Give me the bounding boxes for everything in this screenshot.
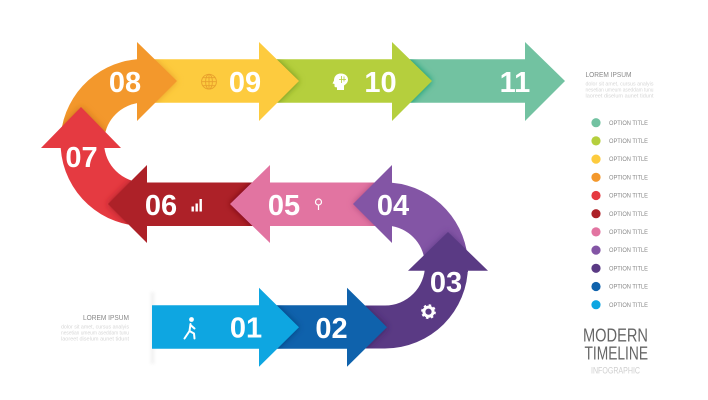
icon: bar chart (192, 199, 202, 212)
arrow 03 (362, 232, 488, 348)
step numbers: 04 (377, 190, 409, 222)
icon: walking person (184, 317, 194, 338)
icon: globe (202, 74, 216, 89)
step numbers: 10 (364, 67, 397, 99)
text block: upper right (586, 70, 654, 100)
legend: OPTION TITLE (609, 303, 648, 309)
step numbers: 03 (430, 267, 462, 299)
text block: lower left: nesetian umeum aseddam tunu (61, 330, 129, 336)
title (583, 326, 648, 376)
text block: upper right: LOREM IPSUM (586, 70, 632, 79)
step numbers: 09 (229, 67, 261, 99)
legend: OPTION TITLE (609, 248, 648, 254)
legend: OPTION TITLE (609, 139, 648, 145)
step numbers: 07 (65, 142, 98, 174)
arrow 01 (152, 288, 299, 367)
text block: lower left (61, 313, 130, 342)
text block: upper right: laoreet diselum aunet tidunt (586, 94, 654, 100)
legend: OPTION TITLE (609, 230, 648, 236)
legend: OPTION TITLE (609, 266, 648, 272)
icon: key pin (316, 199, 322, 210)
legend: OPTION TITLE (609, 157, 648, 163)
text block: lower left: LOREM IPSUM (83, 313, 129, 322)
arrow 08 (62, 42, 178, 132)
arrow 05 (230, 165, 376, 243)
arrow 07 (41, 106, 132, 225)
legend: OPTION TITLE (609, 175, 648, 181)
text block: lower left: dolor sit amet, cursus analyis (61, 324, 130, 330)
legend: OPTION TITLE (609, 121, 648, 127)
step numbers: 02 (315, 313, 348, 345)
icon: head with brain (332, 74, 348, 90)
arrow 02 (276, 288, 387, 367)
step numbers: 11 (500, 67, 530, 99)
title: TIMELINE (584, 343, 648, 363)
arrow 11 (409, 42, 565, 121)
legend: OPTION TITLE (609, 285, 648, 291)
arrow 06 (108, 165, 255, 243)
arrow 04 (353, 165, 468, 272)
legend (591, 118, 648, 309)
step numbers (65, 67, 530, 345)
arrow 09 (154, 42, 299, 121)
step numbers: 01 (230, 312, 262, 344)
legend: OPTION TITLE (609, 212, 648, 218)
left edge shadow of arrow 01 (151, 292, 154, 364)
step numbers: 06 (145, 190, 177, 222)
icon: gear (422, 305, 435, 318)
text block: lower left: laoreet diselum aunet tidunt (61, 336, 130, 342)
legend: OPTION TITLE (609, 194, 648, 200)
text block: upper right: dolor sit amet, cursus analyis (586, 82, 654, 88)
title: MODERN (583, 326, 648, 346)
title: INFOGRAPHIC (591, 366, 640, 376)
step numbers: 08 (109, 67, 141, 99)
step numbers: 05 (268, 190, 300, 222)
arrow 10 (276, 42, 432, 121)
text block: upper right: nesetian umeum aseddam tunu (586, 88, 654, 94)
